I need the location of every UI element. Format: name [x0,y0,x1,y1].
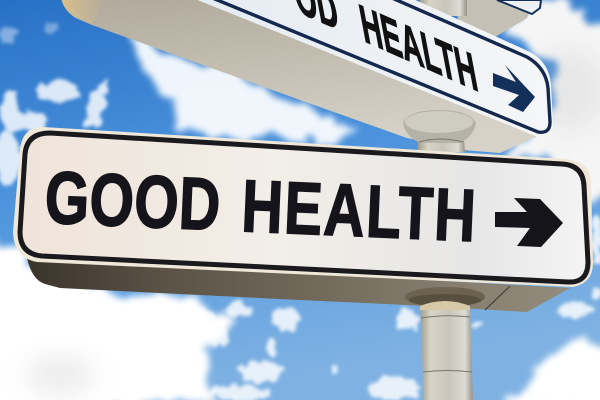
lower pole [420,300,473,400]
main sign underside seam [485,286,510,310]
main sign [13,127,593,312]
top sign [61,0,553,153]
top sign collar and neck [403,110,476,152]
main sign face edge [13,127,593,287]
top sign end cap [61,0,105,25]
top sign arrow [493,65,535,112]
top sign text [288,0,482,104]
top sign underside [61,0,540,153]
main sign underside [27,258,570,312]
top sign face [190,0,553,137]
top sign border [210,0,550,132]
main sign arrow [495,198,563,247]
main sign face [20,133,588,282]
main sign text: HEALTH [240,165,479,258]
main sign text [43,156,479,258]
pole collar under main sign [405,287,485,310]
back small sign behind top [420,0,541,37]
main sign text: GOOD [43,156,222,247]
